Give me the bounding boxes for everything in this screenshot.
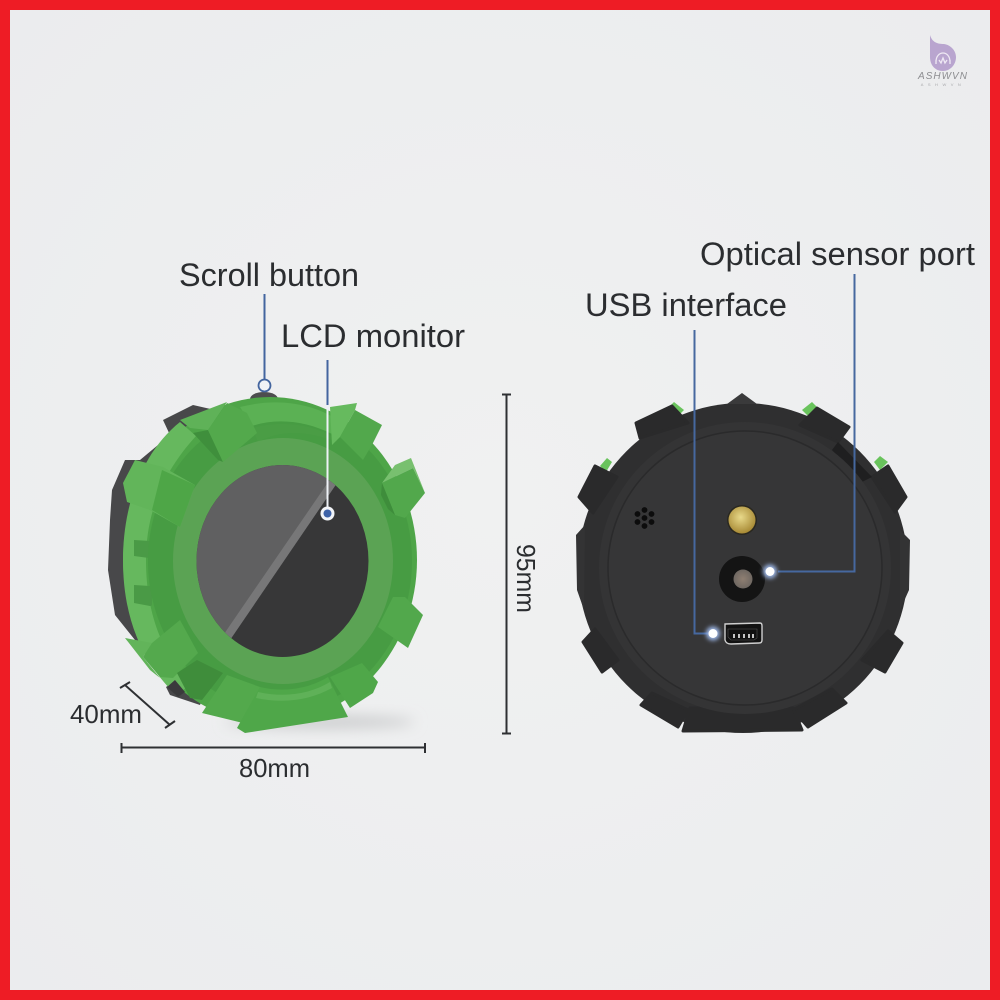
product: front view, green case	[108, 392, 425, 733]
bumper tab: bottom center	[237, 677, 348, 733]
callout: Scroll button	[179, 257, 359, 392]
dimension: 40mm depth	[70, 682, 175, 729]
bumper tab: right upper	[381, 458, 425, 518]
LCD screen	[196, 465, 368, 657]
dark rear body	[108, 405, 240, 705]
housing	[578, 403, 908, 733]
callout: Scroll button: Scroll button	[179, 257, 359, 293]
logo: Ashwvn: ASHWVN	[917, 71, 968, 82]
dimension: 40mm depth: 40mm	[70, 699, 142, 729]
brass button	[727, 505, 757, 535]
ground shadow	[225, 716, 415, 728]
green tab peeks	[600, 402, 888, 472]
side lighter band	[123, 422, 196, 695]
side ribs	[576, 525, 910, 610]
callout: LCD monitor	[281, 318, 465, 520]
callout: Optical sensor port	[700, 236, 975, 578]
dimension: 80mm width	[122, 743, 425, 783]
scroll button	[250, 392, 278, 406]
speaker holes	[635, 507, 654, 529]
dimension: 80mm width: 80mm	[239, 753, 310, 783]
USB port	[725, 623, 762, 644]
dimension: 95mm height	[502, 394, 541, 734]
bumper tab: bottom-left	[177, 660, 260, 723]
optical sensor port	[719, 556, 765, 602]
product: back view, black case	[576, 393, 910, 733]
dimension: 95mm height: 95mm	[511, 544, 541, 613]
callout: USB interface: USB interface	[585, 287, 787, 323]
logo: Ashwvn	[917, 35, 968, 87]
slots on side	[134, 540, 151, 558]
callout: Optical sensor port: Optical sensor port	[700, 236, 975, 272]
dark bottom-left foot	[167, 680, 185, 697]
upper highlight arc	[240, 402, 338, 434]
callout: USB interface	[585, 287, 787, 640]
black tabs	[579, 406, 906, 731]
green body outer	[123, 397, 417, 723]
bumper tab: left upper	[123, 460, 195, 527]
callout: LCD monitor: LCD monitor	[281, 318, 465, 354]
bumper tab: top-right	[330, 403, 382, 460]
inner plate	[599, 422, 891, 714]
ring recess	[148, 411, 412, 711]
bumper tab: right lower	[378, 597, 423, 648]
flat face ring	[173, 438, 393, 684]
bumper tab: bottom-right	[330, 663, 378, 708]
bumper tab: left lower	[125, 620, 198, 678]
bumper tab: top-left	[180, 402, 257, 462]
logo: Ashwvn: ASHWVN	[921, 82, 965, 87]
